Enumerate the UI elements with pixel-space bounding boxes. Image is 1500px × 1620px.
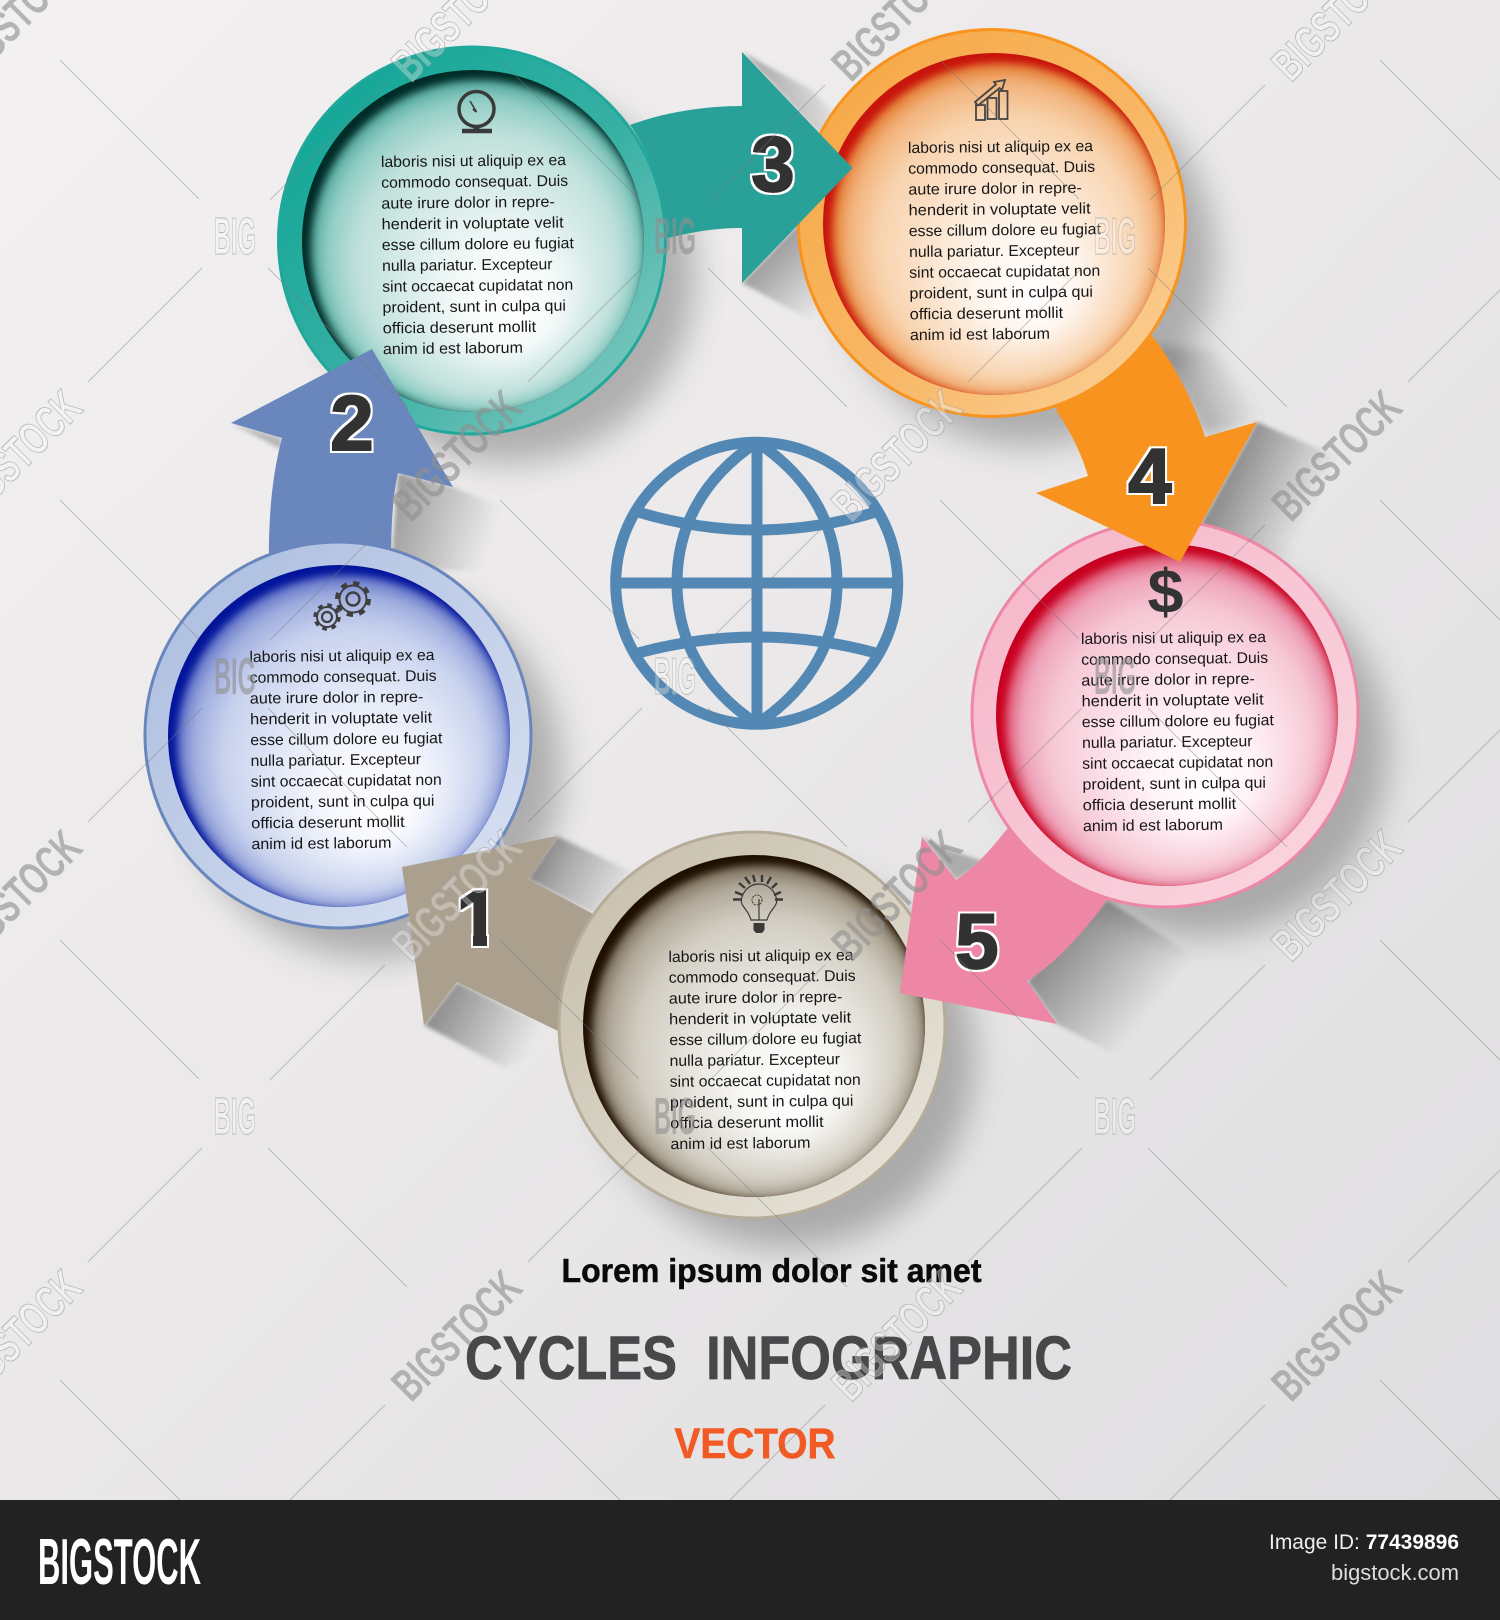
text: pink body: laboris nisi ut aliquip ex ea (1081, 629, 1266, 648)
text: orange body: sint occaecat cupidatat non (909, 263, 1100, 282)
text: orange body: laboris nisi ut aliquip ex ea (908, 138, 1093, 157)
watermark overlay: BIG (1094, 208, 1136, 266)
number 4: 4 (1128, 432, 1172, 520)
watermark overlay: BIG (654, 208, 696, 266)
watermark overlay: BIG (654, 648, 696, 706)
watermark overlay: BIG (214, 1088, 256, 1146)
text: blue body: anim id est laborum (251, 835, 391, 853)
text: blue body: sint occaecat cupidatat non (251, 772, 442, 791)
footer bar: BIGSTOCK (38, 1525, 201, 1598)
subtitle: Lorem ipsum dolor sit amet (562, 1252, 982, 1289)
icon: dollar: $ (1148, 558, 1184, 627)
text: pink body: sint occaecat cupidatat non (1082, 754, 1273, 773)
panel: pink circle (972, 521, 1358, 907)
text: blue body: esse cillum dolore eu fugiat (250, 730, 443, 749)
cast shadows (185, 52, 1388, 1248)
text: blue body (249, 647, 444, 853)
watermark overlay: BIGSTOCK (821, 1260, 971, 1410)
text: orange body: aute irure dolor in repre- (908, 180, 1082, 199)
text: pink body: aute irure dolor in repre- (1081, 671, 1255, 690)
text: teal body: henderit in voluptate velit (382, 214, 564, 233)
icon: gears (315, 583, 369, 629)
number 3: 3 (751, 120, 795, 208)
text: blue body: proident, sunt in culpa qui (251, 793, 435, 812)
text: teal body: officia deserunt mollit (383, 319, 537, 337)
text: teal body: anim id est laborum (383, 340, 523, 358)
text: teal body: aute irure dolor in repre- (381, 194, 555, 213)
text: beige body: sint occaecat cupidatat non (670, 1072, 861, 1091)
text: teal body: esse cillum dolore eu fugiat (382, 235, 575, 254)
arrow 2: blue (231, 349, 453, 570)
vector label: VECTOR (674, 1420, 836, 1468)
text: pink body: officia deserunt mollit (1083, 796, 1237, 814)
text: beige body: officia deserunt mollit (670, 1114, 824, 1132)
watermark overlay: BIGSTOCK (381, 380, 531, 530)
title: CYCLES INFOGRAPHIC (465, 1324, 1072, 1392)
icon: clock (459, 92, 494, 131)
text: pink body: proident, sunt in culpa qui (1082, 775, 1266, 794)
text: orange body: henderit in voluptate velit (909, 200, 1091, 219)
text: beige body: aute irure dolor in repre- (669, 989, 842, 1008)
text: orange body: anim id est laborum (910, 326, 1050, 344)
text: teal body: laboris nisi ut aliquip ex ea (381, 152, 566, 171)
footer url: bigstock.com (1331, 1560, 1459, 1585)
text: beige body: esse cillum dolore eu fugiat (669, 1030, 862, 1049)
watermark overlay: BIGSTOCK (821, 820, 971, 970)
watermark overlay: BIGSTOCK (821, 380, 971, 530)
watermark overlay: BIGSTOCK (1261, 1260, 1411, 1410)
arrow 1: beige (402, 836, 592, 1031)
watermark overlay: BIGSTOCK (381, 1260, 531, 1410)
icon: bar chart (975, 80, 1008, 120)
panel: beige circle (559, 832, 945, 1218)
text: teal body: proident, sunt in culpa qui (382, 298, 566, 317)
text: beige body: commodo consequat. Duis (669, 968, 856, 987)
text: blue body: commodo consequat. Duis (250, 668, 437, 687)
watermark overlay: BIG (1094, 1088, 1136, 1146)
text: blue body: officia deserunt mollit (251, 814, 405, 832)
image id: Image ID: 77439896 (1269, 1531, 1459, 1554)
text: teal body (381, 152, 576, 358)
text: teal body: commodo consequat. Duis (381, 173, 568, 192)
text: beige body: anim id est laborum (670, 1135, 810, 1153)
panel: orange circle (798, 30, 1186, 416)
text: orange body (908, 138, 1103, 344)
text: blue body: aute irure dolor in repre- (250, 689, 423, 708)
text: teal body: sint occaecat cupidatat non (382, 277, 573, 296)
watermark overlay: BIG (214, 208, 256, 266)
text: beige body: henderit in voluptate velit (669, 1009, 852, 1028)
watermark overlay: BIGSTOCK (381, 820, 531, 970)
text: pink body: henderit in voluptate velit (1082, 691, 1264, 710)
watermark overlay: BIG (214, 648, 256, 706)
panel: teal circle (278, 47, 666, 434)
text: pink body: esse cillum dolore eu fugiat (1082, 712, 1275, 731)
text: beige body (668, 947, 863, 1153)
text: blue body: henderit in voluptate velit (250, 709, 433, 728)
number 2: 2 (330, 379, 374, 467)
watermark overlay: BIG (1094, 648, 1136, 706)
footer bar (0, 1500, 1500, 1620)
panel: blue circle (145, 542, 531, 928)
icon: globe (616, 442, 898, 724)
watermark overlay: BIGSTOCK (1261, 380, 1411, 530)
arrow 3: teal (630, 52, 852, 283)
text: pink body: anim id est laborum (1083, 817, 1223, 835)
text: beige body: nulla pariatur. Excepteur (669, 1051, 840, 1070)
text: orange body: esse cillum dolore eu fugiat (909, 221, 1102, 240)
text: pink body (1081, 629, 1276, 835)
text: pink body: nulla pariatur. Excepteur (1082, 733, 1253, 752)
text: orange body: commodo consequat. Duis (908, 159, 1095, 178)
text: beige body: laboris nisi ut aliquip ex ea (668, 947, 854, 966)
number 5: 5 (955, 897, 999, 985)
arrow 5: pink (900, 780, 1110, 1024)
text: orange body: proident, sunt in culpa qui (909, 284, 1093, 303)
number 1: 1 (456, 874, 500, 962)
watermark overlay: BIGSTOCK (1261, 820, 1411, 970)
text: orange body: nulla pariatur. Excepteur (909, 242, 1080, 261)
text: blue body: laboris nisi ut aliquip ex ea (249, 647, 435, 666)
text: orange body: officia deserunt mollit (910, 305, 1064, 323)
watermark overlay: BIG (654, 1088, 696, 1146)
text: pink body: commodo consequat. Duis (1081, 650, 1268, 669)
icon: light bulb (733, 875, 783, 933)
text: blue body: nulla pariatur. Excepteur (250, 751, 421, 770)
text: beige body: proident, sunt in culpa qui (670, 1093, 854, 1112)
text: teal body: nulla pariatur. Excepteur (382, 256, 553, 275)
arrow 4: orange (1036, 300, 1257, 562)
